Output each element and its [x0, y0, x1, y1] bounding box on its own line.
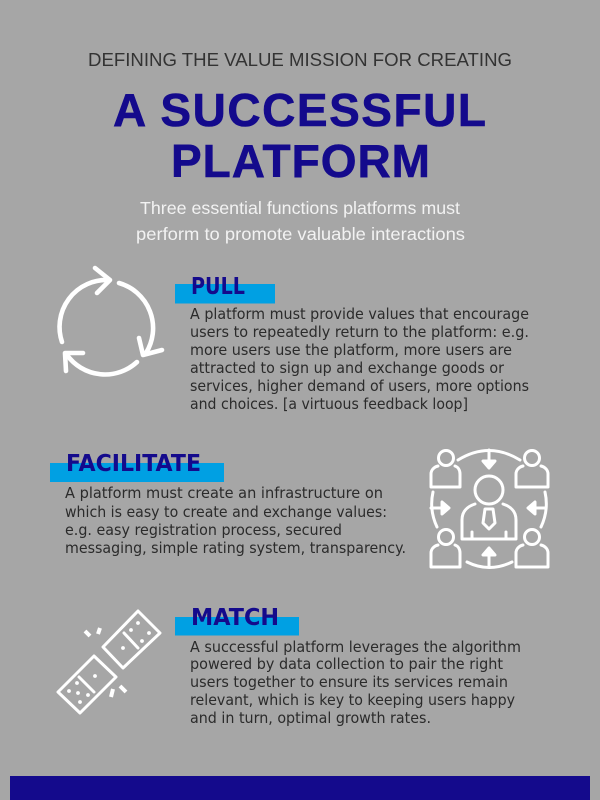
text block: match: users together to ensure its services remain: [190, 673, 508, 691]
text block: facilitate: e.g. easy registration process, secured: [65, 521, 342, 539]
text block: pull: [190, 305, 529, 413]
icon: cycle arrows: [60, 268, 162, 374]
spark marks: [85, 628, 126, 697]
bottom-right person: [516, 530, 548, 567]
icon: people network: [431, 450, 548, 568]
footer bar: [10, 776, 590, 800]
text block: match: and in turn, optimal growth rates.: [190, 709, 431, 727]
domino pips: [67, 621, 151, 704]
title: [113, 84, 486, 187]
panel: facilitate: [50, 451, 406, 557]
text block: facilitate: messaging, simple rating system, transparency.: [65, 539, 406, 557]
subtitle: Three essential functions platforms must: [140, 198, 460, 218]
panel: pull: [175, 274, 529, 413]
text block: facilitate: which is easy to create and exchange values:: [65, 503, 387, 521]
ring and arrows: [431, 450, 546, 568]
text block: facilitate: [65, 484, 406, 557]
lower domino: [58, 656, 116, 713]
text block: pull: and choices. [a virtuous feedback loop]: [190, 395, 468, 413]
text block: pull: A platform must provide values that encourage: [190, 305, 529, 323]
upper domino: [103, 611, 160, 668]
heading highlight: pull: [175, 284, 275, 304]
bottom-left person: [431, 530, 460, 567]
top-right person: [516, 450, 548, 487]
subtitle: perform to promote valuable interactions: [136, 224, 465, 244]
panel: match: [175, 605, 521, 727]
text block: match: [190, 638, 521, 727]
title: PLATFORM: [171, 135, 430, 187]
text block: match: powered by data collection to pair the right: [190, 655, 503, 673]
subtitle: [136, 198, 465, 244]
text block: pull: attracted to sign up and exchange goods or: [190, 359, 505, 377]
title: A SUCCESSFUL: [113, 84, 486, 136]
central person: [462, 476, 516, 539]
heading: match: MATCH: [191, 605, 279, 631]
text block: facilitate: A platform must create an infrastructure on: [65, 484, 383, 502]
heading highlight: match: [175, 617, 299, 636]
text block: match: relevant, which is key to keeping users happy: [190, 691, 515, 709]
icon: dominoes: [58, 611, 160, 713]
text block: pull: more users use the platform, more users are: [190, 341, 512, 359]
kicker heading: DEFINING THE VALUE MISSION FOR CREATING: [88, 49, 512, 70]
heading highlight: facilitate: [50, 463, 224, 482]
heading: pull: PULL: [191, 274, 245, 300]
text block: pull: services, higher demand of users, more options: [190, 377, 529, 395]
top-left person: [431, 450, 460, 487]
text block: match: A successful platform leverages the algorithm: [190, 638, 521, 656]
text block: pull: users to repeatedly return to the platform: e.g.: [190, 323, 529, 341]
heading: facilitate: FACILITATE: [66, 451, 201, 477]
